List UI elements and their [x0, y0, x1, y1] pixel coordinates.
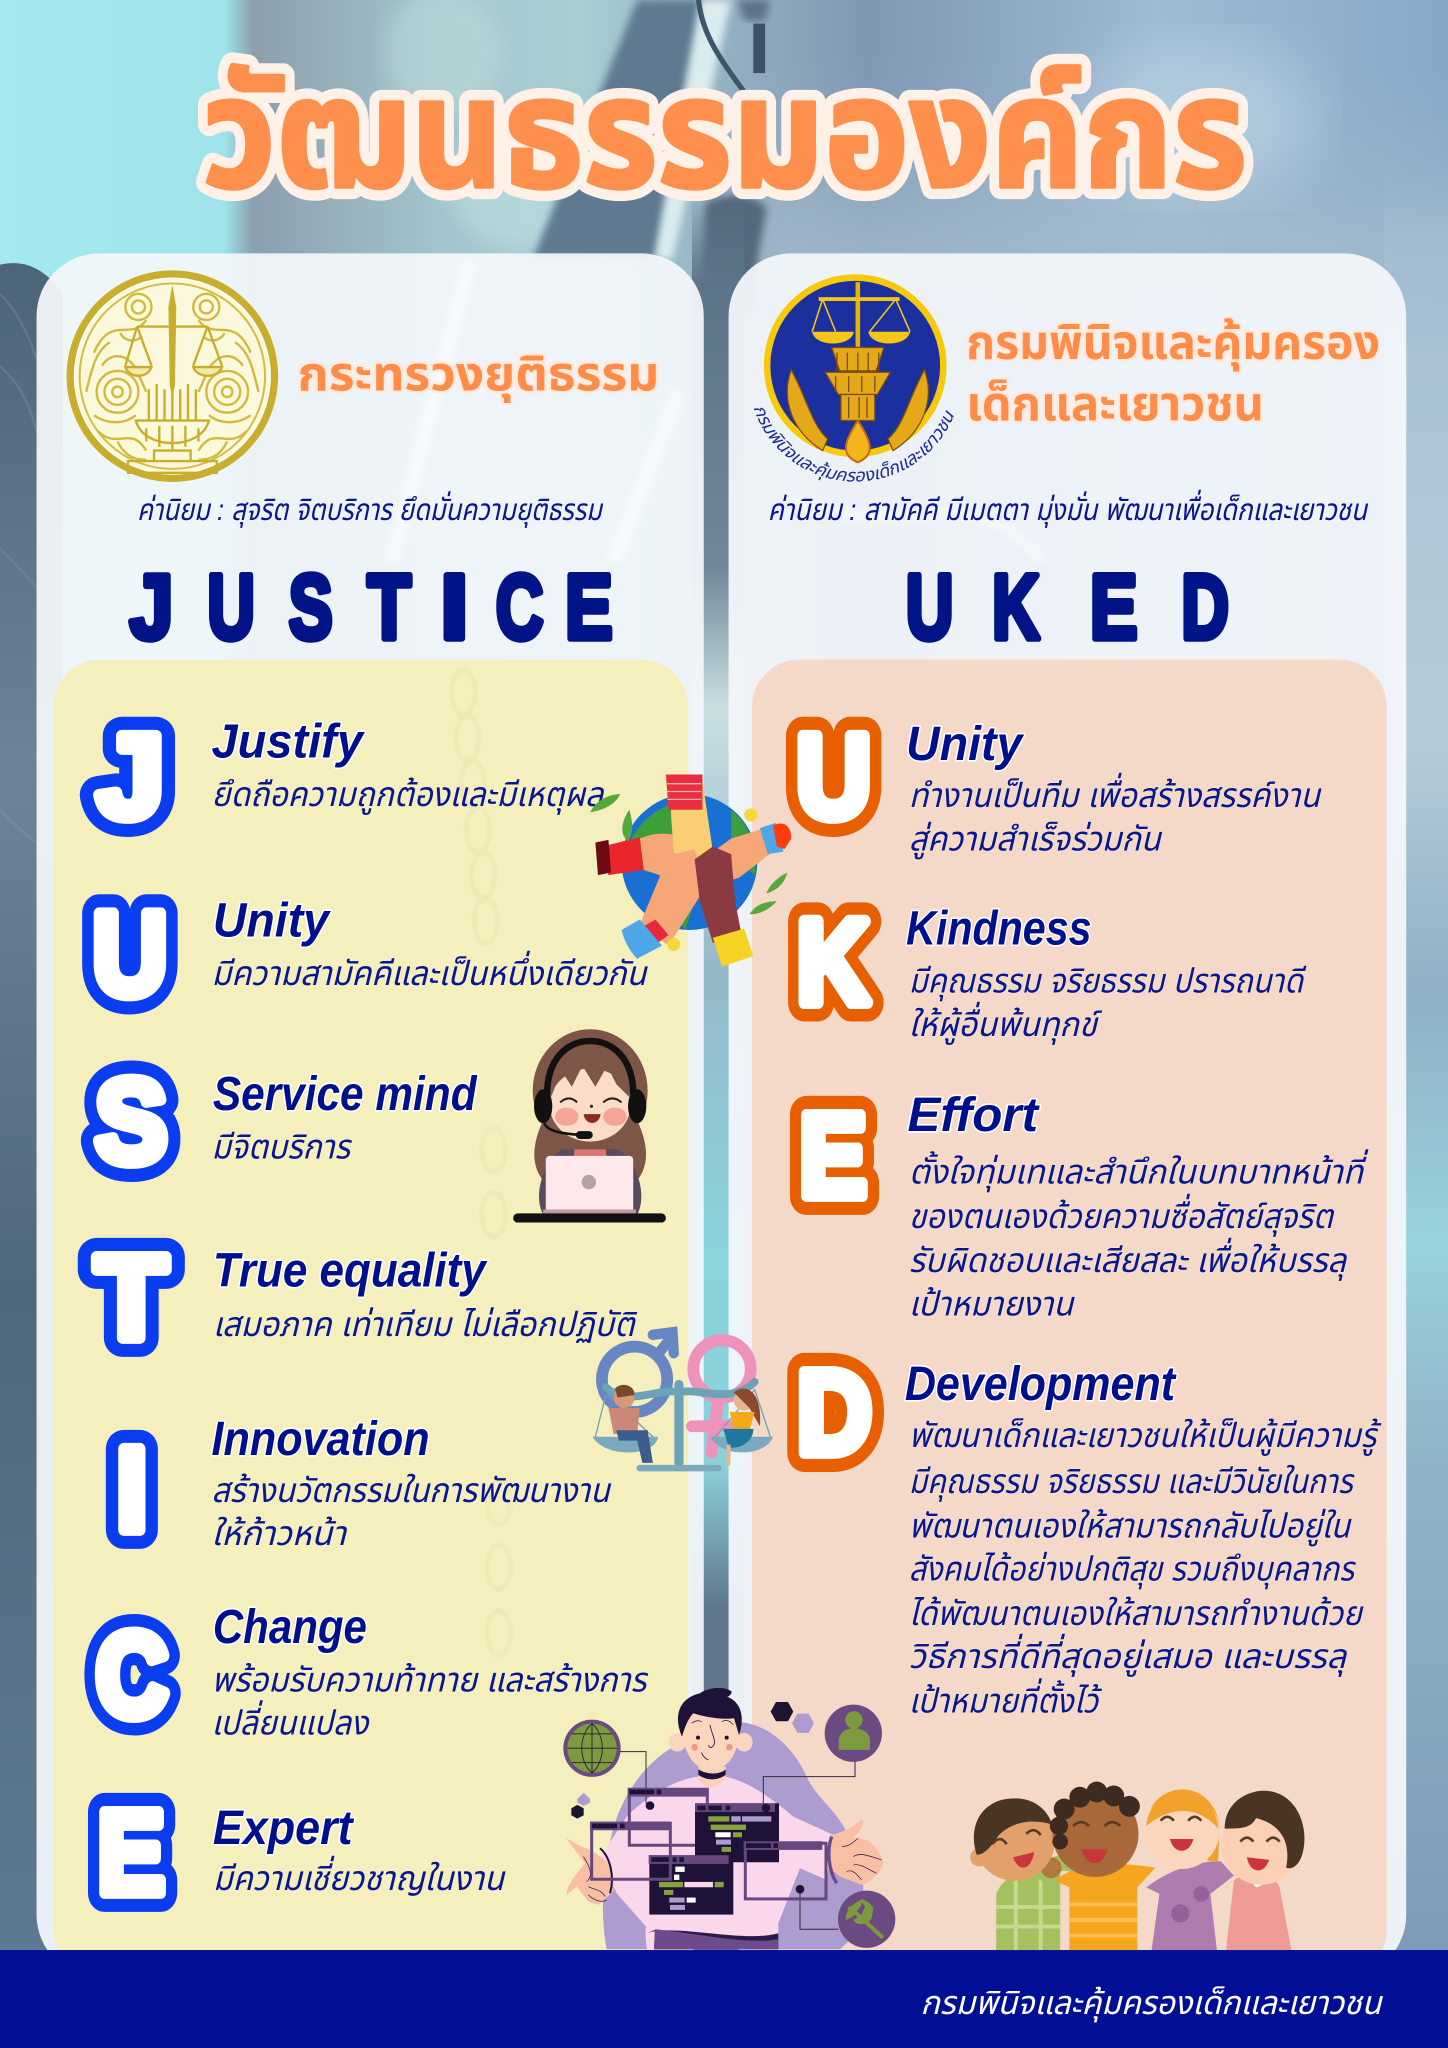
title: วัฒนธรรมองค์กร	[202, 48, 1247, 220]
letter tile: D orange: D	[797, 1348, 872, 1479]
footer text: กรมพินิจและคุ้มครองเด็กและเยาวชน	[921, 1984, 1383, 2023]
letter tile: K orange: K	[797, 896, 869, 1027]
heading: JUSTICE: C	[496, 556, 543, 658]
heading: JUSTICE: U	[207, 556, 255, 658]
letter tile: J: J	[97, 712, 164, 843]
letter tile: T: T	[95, 1232, 167, 1363]
illustration: hands on globe	[590, 775, 791, 967]
letter tile: T: T	[95, 1232, 167, 1363]
uked unity text: สู่ความสำเร็จร่วมกัน	[909, 820, 1163, 859]
letter tile: S: S	[95, 1056, 167, 1187]
logo: department of juvenile observation seal	[754, 274, 954, 482]
heading: JUSTICE: I	[440, 557, 468, 659]
heading: JUSTICE: S	[289, 556, 333, 658]
letter tile: I: I	[116, 1424, 147, 1556]
values: department: ค่านิยม : สามัคคี มีเมตตา มุ่งมั่น พัฒนาเพื่อเด็กและเยาวชน	[768, 489, 1368, 528]
kindness text	[906, 901, 1307, 1045]
heading: UKED: D	[1181, 556, 1229, 658]
illustration: programmer with code windows	[563, 1688, 895, 1949]
unity text: มีความสามัคคีและเป็นหนึ่งเดียวกัน	[212, 950, 648, 993]
kindness text: มีคุณธรรม จริยธรรม ปรารถนาดี	[909, 963, 1307, 1002]
effort text	[907, 1088, 1369, 1323]
letter tile: U: U	[93, 889, 167, 1020]
faint chain texture	[452, 670, 511, 1655]
true equality text: True equality	[213, 1244, 488, 1298]
logo: ministry of justice seal	[67, 270, 278, 482]
footer bar	[0, 1950, 1448, 2048]
letter tile: E: E	[98, 1788, 165, 1919]
true equality text: เสมอภาค เท่าเทียม ไม่เลือกปฏิบัติ	[213, 1306, 637, 1344]
heading: JUSTICE	[130, 556, 613, 659]
letter tile: J: J	[97, 712, 164, 843]
development text: เป้าหมายที่ตั้งไว้	[909, 1677, 1103, 1720]
development text	[905, 1357, 1382, 1720]
heading: UKED: K	[992, 556, 1040, 658]
letter tile: E orange: E	[799, 1091, 867, 1221]
expert text	[213, 1801, 506, 1898]
letter tile: C: C	[96, 1609, 168, 1741]
development text: พัฒนาตนเองให้สามารถกลับไปอยู่ใน	[909, 1507, 1352, 1546]
letter tile: E orange: E	[799, 1091, 867, 1221]
unity text	[212, 893, 648, 993]
heading: UKED	[906, 556, 1229, 659]
effort text: รับผิดชอบและเสียสละ เพื่อให้บรรลุ	[909, 1237, 1348, 1281]
expert text: มีความเชี่ยวชาญในงาน	[213, 1855, 506, 1898]
true equality text	[213, 1244, 637, 1344]
logo: department of juvenile observation seal: กรมพินิจและคุ้มครองเด็กและเยาวชน	[754, 408, 954, 482]
faint photo streaks in cards	[392, 261, 1045, 562]
service mind text: มีจิตบริการ	[212, 1129, 352, 1167]
code window: outline back	[629, 1789, 707, 1845]
justify text	[212, 715, 605, 815]
letter tile: K orange: K	[797, 896, 869, 1027]
uked unity text: Unity	[906, 717, 1024, 771]
heading: JUSTICE: J	[130, 557, 173, 659]
panel: uked card	[729, 253, 1406, 1977]
expert text: Expert	[213, 1801, 354, 1855]
values: ministry: ค่านิยม : สุจริต จิตบริการ ยึดมั่นความยุติธรรม	[137, 491, 604, 528]
panel: justice values list	[54, 660, 688, 1977]
effort text: ตั้งใจทุ่มเทและสำนึกในบทบาทหน้าที่	[909, 1148, 1369, 1192]
service mind text: Service mind	[213, 1067, 478, 1121]
illustration: call-centre girl	[513, 1029, 666, 1223]
development text: Development	[905, 1357, 1177, 1411]
development text: วิธีการที่ดีที่สุดอยู่เสมอ และบรรลุ	[909, 1633, 1348, 1677]
innovation text: ให้ก้าวหน้า	[212, 1515, 347, 1553]
letter tile: S: S	[95, 1056, 167, 1187]
letter tile: U orange: U	[796, 712, 871, 842]
heading: ministry of justice: กระทรวงยุติธรรม	[298, 348, 659, 404]
heading: department name: กรมพินิจและคุ้มครอง	[966, 316, 1380, 372]
illustration: four friends	[970, 1782, 1304, 1950]
panel: justice card	[37, 253, 704, 1977]
change text	[212, 1600, 649, 1743]
service mind text	[212, 1067, 478, 1167]
development text: สังคมได้อย่างปกติสุข รวมถึงบุคลากร	[909, 1550, 1356, 1589]
letter tile: I: I	[116, 1424, 147, 1556]
development text: พัฒนาเด็กและเยาวชนให้เป็นผู้มีความรู้	[909, 1417, 1382, 1456]
innovation text	[212, 1412, 612, 1553]
uked unity text	[906, 717, 1322, 859]
change text: เปลี่ยนแปลง	[212, 1700, 370, 1743]
effort text: ของตนเองด้วยความซื่อสัตย์สุจริต	[909, 1193, 1334, 1237]
development text: ได้พัฒนาตนเองให้สามารถทำงานด้วย	[909, 1595, 1364, 1633]
kindness text: Kindness	[906, 901, 1092, 955]
heading: department name: เด็กและเยาวชน	[966, 378, 1264, 432]
justify text: Justify	[212, 715, 365, 769]
change text: พร้อมรับความท้าทาย และสร้างการ	[212, 1661, 649, 1699]
heading: JUSTICE: T	[367, 557, 411, 659]
unity text: Unity	[213, 893, 331, 947]
uked unity text: ทำงานเป็นทีม เพื่อสร้างสรรค์งาน	[909, 772, 1322, 815]
heading: department name	[966, 316, 1380, 432]
change text: Change	[213, 1600, 367, 1654]
letter tile: U: U	[93, 889, 167, 1020]
kindness text: ให้ผู้อื่นพ้นทุกข์	[909, 1001, 1103, 1045]
justify text: ยึดถือความถูกต้องและมีเหตุผล	[212, 776, 605, 815]
heading: UKED: U	[906, 556, 953, 658]
innovation text: Innovation	[212, 1412, 430, 1466]
letter tile: E: E	[98, 1788, 165, 1919]
letter tile: D orange: D	[797, 1348, 872, 1479]
illustration: gender equality scale	[593, 1332, 773, 1468]
effort text: Effort	[907, 1088, 1040, 1142]
panel: uked values list	[752, 660, 1387, 1977]
title: วัฒนธรรมองค์กร	[202, 48, 1247, 220]
effort text: เป้าหมายงาน	[909, 1285, 1075, 1323]
heading: UKED: E	[1090, 557, 1138, 659]
letter tile: U orange: U	[796, 712, 871, 842]
heading: JUSTICE: E	[565, 557, 613, 659]
development text: มีคุณธรรม จริยธรรม และมีวินัยในการ	[909, 1463, 1355, 1502]
letter tile: C: C	[96, 1609, 168, 1741]
innovation text: สร้างนวัตกรรมในการพัฒนางาน	[212, 1472, 612, 1510]
